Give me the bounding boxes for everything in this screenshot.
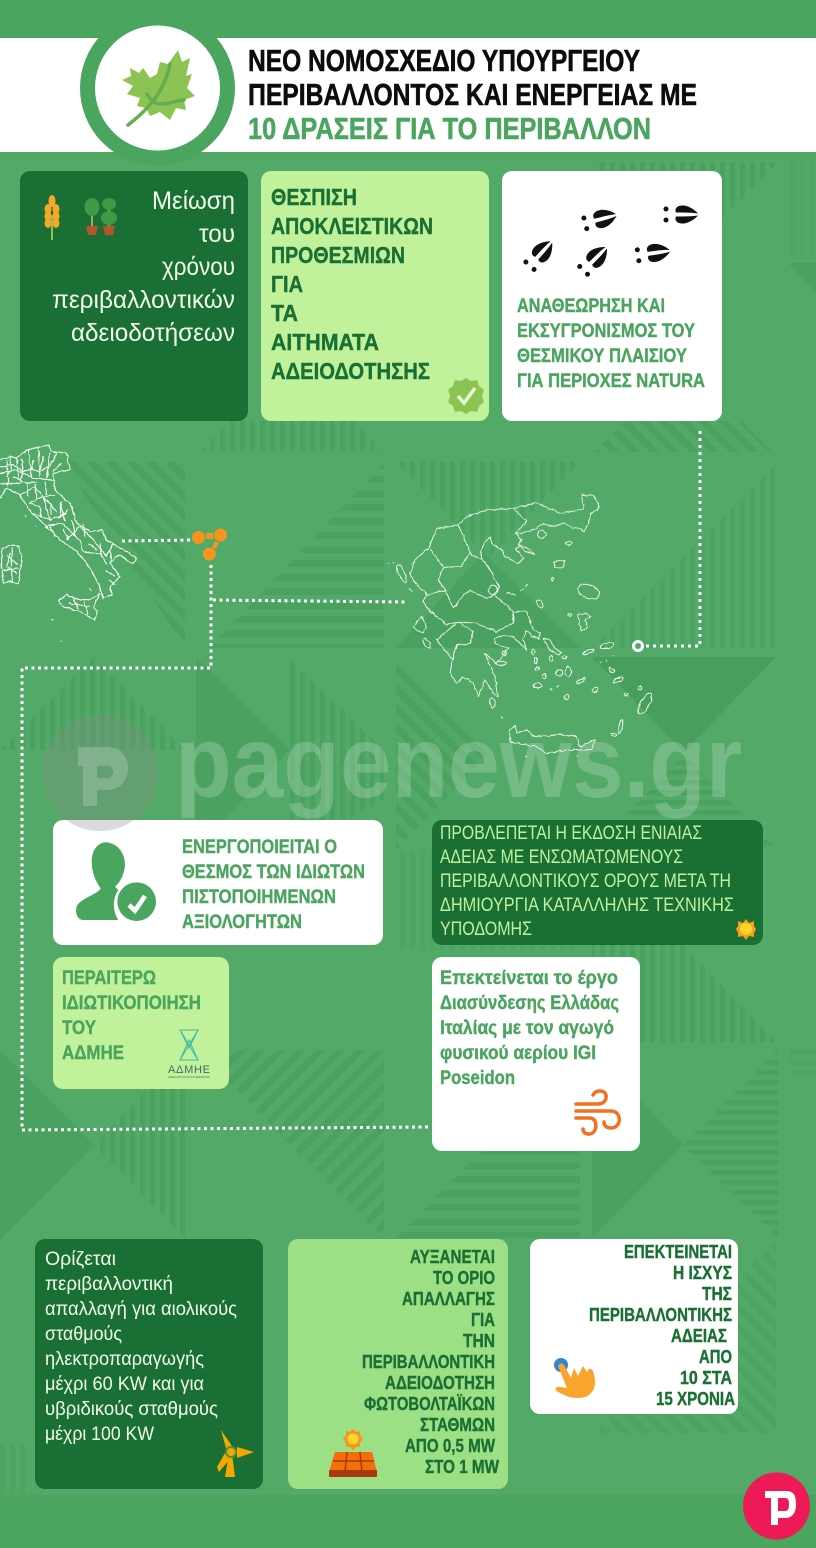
panel: Natura framework: ΕΚΣΥΓΡΟΝΙΣΜΟΣ ΤΟΥ bbox=[517, 320, 695, 342]
icon: wheat bbox=[44, 195, 60, 240]
logo: P badge bbox=[743, 1472, 810, 1540]
title: ΠΕΡΙΒΑΛΛΟΝΤΟΣ ΚΑΙ ΕΝΕΡΓΕΙΑΣ ΜΕ bbox=[248, 77, 697, 112]
panel: exclusive deadlines: ΑΔΕΙΟΔΟΤΗΣΗΣ bbox=[271, 358, 430, 384]
panel: photovoltaic exemption: ΤΗΝ bbox=[463, 1330, 495, 1351]
panel: photovoltaic exemption: ΣΤΑΘΜΩΝ bbox=[420, 1414, 495, 1435]
panel: certified evaluators bbox=[53, 820, 383, 945]
icon: ADMIE logo: ΑΔΜΗΕ bbox=[168, 1064, 210, 1076]
panel: environmental exemption: ηλεκτροπαραγωγής bbox=[45, 1348, 204, 1370]
panel: certified evaluators: ΑΞΙΟΛΟΓΗΤΩΝ bbox=[182, 911, 302, 933]
panel: environmental exemption: απαλλαγή για αιολικούς bbox=[45, 1298, 237, 1320]
panel: permit validity: ΑΠΟ bbox=[699, 1346, 732, 1367]
panel: Natura framework: ΓΙΑ ΠΕΡΙΟΧΕΣ NATURA bbox=[517, 370, 705, 392]
panel: certified evaluators: ΠΙΣΤΟΠΟΙΗΜΕΝΩΝ bbox=[182, 886, 336, 908]
panel: Natura framework: ΘΕΣΜΙΚΟΥ ΠΛΑΙΣΙΟΥ bbox=[517, 345, 687, 367]
panel: photovoltaic exemption: ΑΥΞΑΝΕΤΑΙ bbox=[410, 1246, 495, 1267]
panel: permit time reduction bbox=[20, 171, 248, 421]
panel: photovoltaic exemption: ΑΠΟ 0,5 MW bbox=[405, 1435, 495, 1456]
header band bbox=[0, 38, 816, 152]
panel: environmental exemption: Ορίζεται bbox=[45, 1248, 116, 1270]
panel: environmental exemption: σταθμούς bbox=[45, 1323, 122, 1345]
panel: ADMIE privatisation bbox=[53, 957, 229, 1089]
panel: IGI Poseidon: Ιταλίας με τον αγωγό bbox=[440, 1017, 614, 1039]
panel: exclusive deadlines: ΑΠΟΚΛΕΙΣΤΙΚΩΝ bbox=[271, 213, 433, 239]
panel: environmental exemption: περιβαλλοντική bbox=[45, 1273, 173, 1295]
panel: permit validity bbox=[530, 1239, 738, 1414]
panel: ADMIE privatisation: ΙΔΙΩΤΙΚΟΠΟΙΗΣΗ bbox=[62, 992, 201, 1014]
panel: certified evaluators: ΕΝΕΡΓΟΠΟΙΕΙΤΑΙ Ο bbox=[182, 836, 337, 858]
icon: ADMIE logo: ΑΝΕΞΑΡΤΗΤΟΣ ΔΙΑΧΕΙΡΙΣΤΗΣ bbox=[168, 1075, 210, 1079]
panel: IGI Poseidon: Διασύνδεσης Ελλάδας bbox=[440, 992, 619, 1014]
title: 10 ΔΡΑΣΕΙΣ ΓΙΑ ΤΟ ΠΕΡΙΒΑΛΛΟΝ bbox=[248, 111, 651, 146]
panel: permit time reduction: αδειοδοτήσεων bbox=[71, 319, 235, 347]
panel: permit validity: 10 ΣΤΑ bbox=[680, 1367, 732, 1388]
icon: leaf badge bbox=[88, 18, 228, 158]
title: ΝΕΟ ΝΟΜΟΣΧΕΔΙΟ ΥΠΟΥΡΓΕΙΟΥ bbox=[248, 43, 640, 78]
icon: wind turbine bbox=[217, 1430, 254, 1477]
panel: permit validity: 15 ΧΡΟΝΙΑ bbox=[656, 1388, 735, 1409]
panel: ADMIE privatisation: ΑΔΜΗΕ bbox=[62, 1042, 124, 1064]
panel: IGI Poseidon: Επεκτείνεται το έργο bbox=[440, 967, 618, 989]
title bbox=[248, 43, 697, 146]
map: Greece outline bbox=[387, 495, 655, 756]
panel: photovoltaic exemption: ΤΟ ΟΡΙΟ bbox=[433, 1267, 495, 1288]
panel: permit time reduction: χρόνου bbox=[162, 253, 235, 281]
map: Italy outline bbox=[0, 445, 136, 641]
panel: Natura framework: ΑΝΑΘΕΩΡΗΣΗ ΚΑΙ bbox=[517, 295, 665, 317]
panel: photovoltaic exemption bbox=[288, 1239, 508, 1489]
panel: permit validity: ΑΔΕΙΑΣ bbox=[671, 1325, 727, 1346]
panel: ADMIE privatisation: ΤΟΥ bbox=[62, 1017, 96, 1039]
panel: environmental exemption: μέχρι 100 KW bbox=[45, 1423, 155, 1445]
panel: permit time reduction: Μείωση bbox=[152, 187, 235, 215]
panel: photovoltaic exemption: ΣΤΟ 1 MW bbox=[425, 1456, 499, 1477]
panel: Natura framework bbox=[502, 171, 722, 421]
panel: single permit: ΠΡΟΒΛΕΠΕΤΑΙ Η ΕΚΔΟΣΗ ΕΝΙΑΙΑΣ bbox=[440, 822, 702, 844]
panel: permit time reduction: περιβαλλοντικών bbox=[52, 286, 235, 314]
panel: permit time reduction: του bbox=[199, 220, 235, 248]
icon: sun bbox=[736, 919, 756, 940]
icon: wind bbox=[576, 1091, 619, 1134]
panel: photovoltaic exemption: ΦΩΤΟΒΟΛΤΑΪΚΩΝ bbox=[364, 1393, 495, 1414]
panel: photovoltaic exemption: ΑΔΕΙΟΔΟΤΗΣΗ bbox=[385, 1372, 495, 1393]
icon: ring marker bbox=[634, 642, 642, 650]
panel: permit validity: ΠΕΡΙΒΑΛΛΟΝΤΙΚΗΣ bbox=[589, 1304, 732, 1325]
panel: environmental exemption: μέχρι 60 KW και για bbox=[45, 1373, 204, 1395]
panel: single permit: ΥΠΟΔΟΜΗΣ bbox=[440, 918, 532, 940]
panel: certified evaluators: ΘΕΣΜΟΣ ΤΩΝ ΙΔΙΩΤΩΝ bbox=[182, 861, 365, 883]
icon: person with check bbox=[76, 842, 156, 921]
panel: single permit bbox=[432, 820, 763, 945]
panel: exclusive deadlines: ΑΙΤΗΜΑΤΑ bbox=[271, 329, 379, 355]
panel: environmental exemption: υβριδικούς σταθμούς bbox=[45, 1398, 218, 1420]
watermark: pagenews.gr bbox=[175, 705, 742, 819]
panel: single permit: ΠΕΡΙΒΑΛΛΟΝΤΙΚΟΥΣ ΟΡΟΥΣ ΜΕΤΑ ΤΗ bbox=[440, 870, 731, 892]
connector: dotted lines from hub bbox=[22, 540, 428, 1130]
icon: potted plants bbox=[84, 198, 117, 235]
icon: pointing hand bbox=[554, 1358, 595, 1398]
panel: photovoltaic exemption: ΠΕΡΙΒΑΛΛΟΝΤΙΚΗ bbox=[362, 1351, 495, 1372]
panel: permit validity: ΤΗΣ bbox=[702, 1283, 732, 1304]
panel: environmental exemption bbox=[35, 1239, 263, 1489]
panel: exclusive deadlines: ΓΙΑ bbox=[271, 271, 303, 297]
panel: IGI Poseidon: Poseidon bbox=[440, 1067, 515, 1089]
panel: exclusive deadlines: ΠΡΟΘΕΣΜΙΩΝ bbox=[271, 242, 405, 268]
panel: ADMIE privatisation: ΠΕΡΑΙΤΕΡΩ bbox=[62, 967, 156, 989]
icon: hoof prints bbox=[522, 205, 698, 279]
panel: single permit: ΑΔΕΙΑΣ ΜΕ ΕΝΣΩΜΑΤΩΜΕΝΟΥΣ bbox=[440, 846, 683, 868]
icon: orange hub bbox=[192, 528, 227, 560]
panel: single permit: ΔΗΜΙΟΥΡΓΙΑ ΚΑΤΑΛΛΗΛΗΣ ΤΕΧΝΙΚΗΣ bbox=[440, 894, 734, 916]
icon: check badge bbox=[448, 378, 484, 414]
panel: IGI Poseidon bbox=[432, 957, 640, 1151]
icon: sun over solar panel bbox=[329, 1429, 377, 1477]
panel: permit validity: Η ΙΣΧΥΣ bbox=[673, 1262, 732, 1283]
panel: photovoltaic exemption: ΑΠΑΛΛΑΓΗΣ bbox=[402, 1288, 495, 1309]
panel: exclusive deadlines: ΘΕΣΠΙΣΗ bbox=[271, 184, 357, 210]
panel: exclusive deadlines bbox=[261, 171, 489, 421]
panel: IGI Poseidon: φυσικού αερίου IGI bbox=[440, 1042, 596, 1064]
icon: ADMIE logo bbox=[168, 1030, 210, 1079]
watermark bbox=[42, 705, 742, 831]
panel: exclusive deadlines: ΤΑ bbox=[271, 300, 298, 326]
connector: dotted line from Natura panel to Greece bbox=[646, 431, 700, 646]
panel: permit validity: ΕΠΕΚΤΕΙΝΕΤΑΙ bbox=[624, 1241, 732, 1262]
panel: photovoltaic exemption: ΓΙΑ bbox=[471, 1309, 495, 1330]
